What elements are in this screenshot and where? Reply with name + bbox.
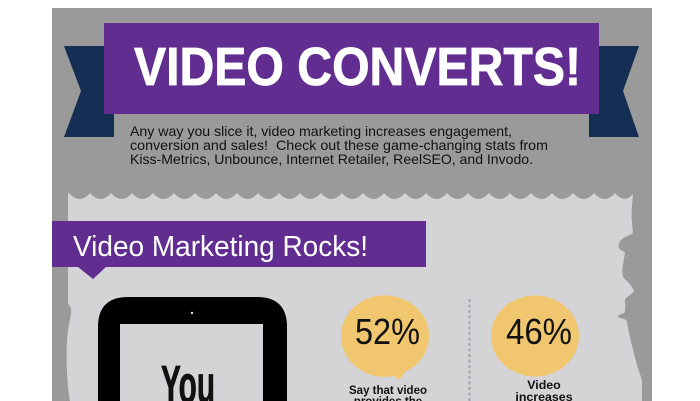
title ribbon xyxy=(64,23,639,137)
percent value: 52% xyxy=(355,311,420,352)
stat: 46% xyxy=(491,296,579,401)
intro text: Kiss-Metrics, Unbounce, Internet Retailer, ReelSEO, and Invodo. xyxy=(130,151,533,167)
speech bubble xyxy=(341,295,429,380)
dotted divider xyxy=(468,299,470,401)
speech bubble xyxy=(491,296,579,376)
heading band xyxy=(52,221,426,267)
title banner xyxy=(104,23,599,114)
tablet camera xyxy=(191,312,193,314)
percent value: 46% xyxy=(506,311,572,352)
tablet frame xyxy=(98,297,287,401)
section heading xyxy=(52,221,426,279)
title: VIDEO CONVERTS! xyxy=(134,37,581,97)
intro text xyxy=(130,123,548,167)
ribbon tail: left xyxy=(64,46,114,137)
stat caption: Video xyxy=(527,378,561,392)
stat: 52% xyxy=(341,295,429,401)
heading text: Video Marketing Rocks! xyxy=(73,231,368,263)
intro text: conversion and sales! Check out these game-changing stats from xyxy=(130,137,548,153)
heading pointer xyxy=(78,267,106,279)
torn paper content panel xyxy=(67,193,642,401)
ribbon tail: right xyxy=(589,46,639,137)
intro text: Any way you slice it, video marketing increases engagement, xyxy=(130,123,512,139)
tablet screen xyxy=(120,324,263,401)
stat caption: Say that video xyxy=(349,385,427,397)
tablet with video logo xyxy=(98,297,287,401)
